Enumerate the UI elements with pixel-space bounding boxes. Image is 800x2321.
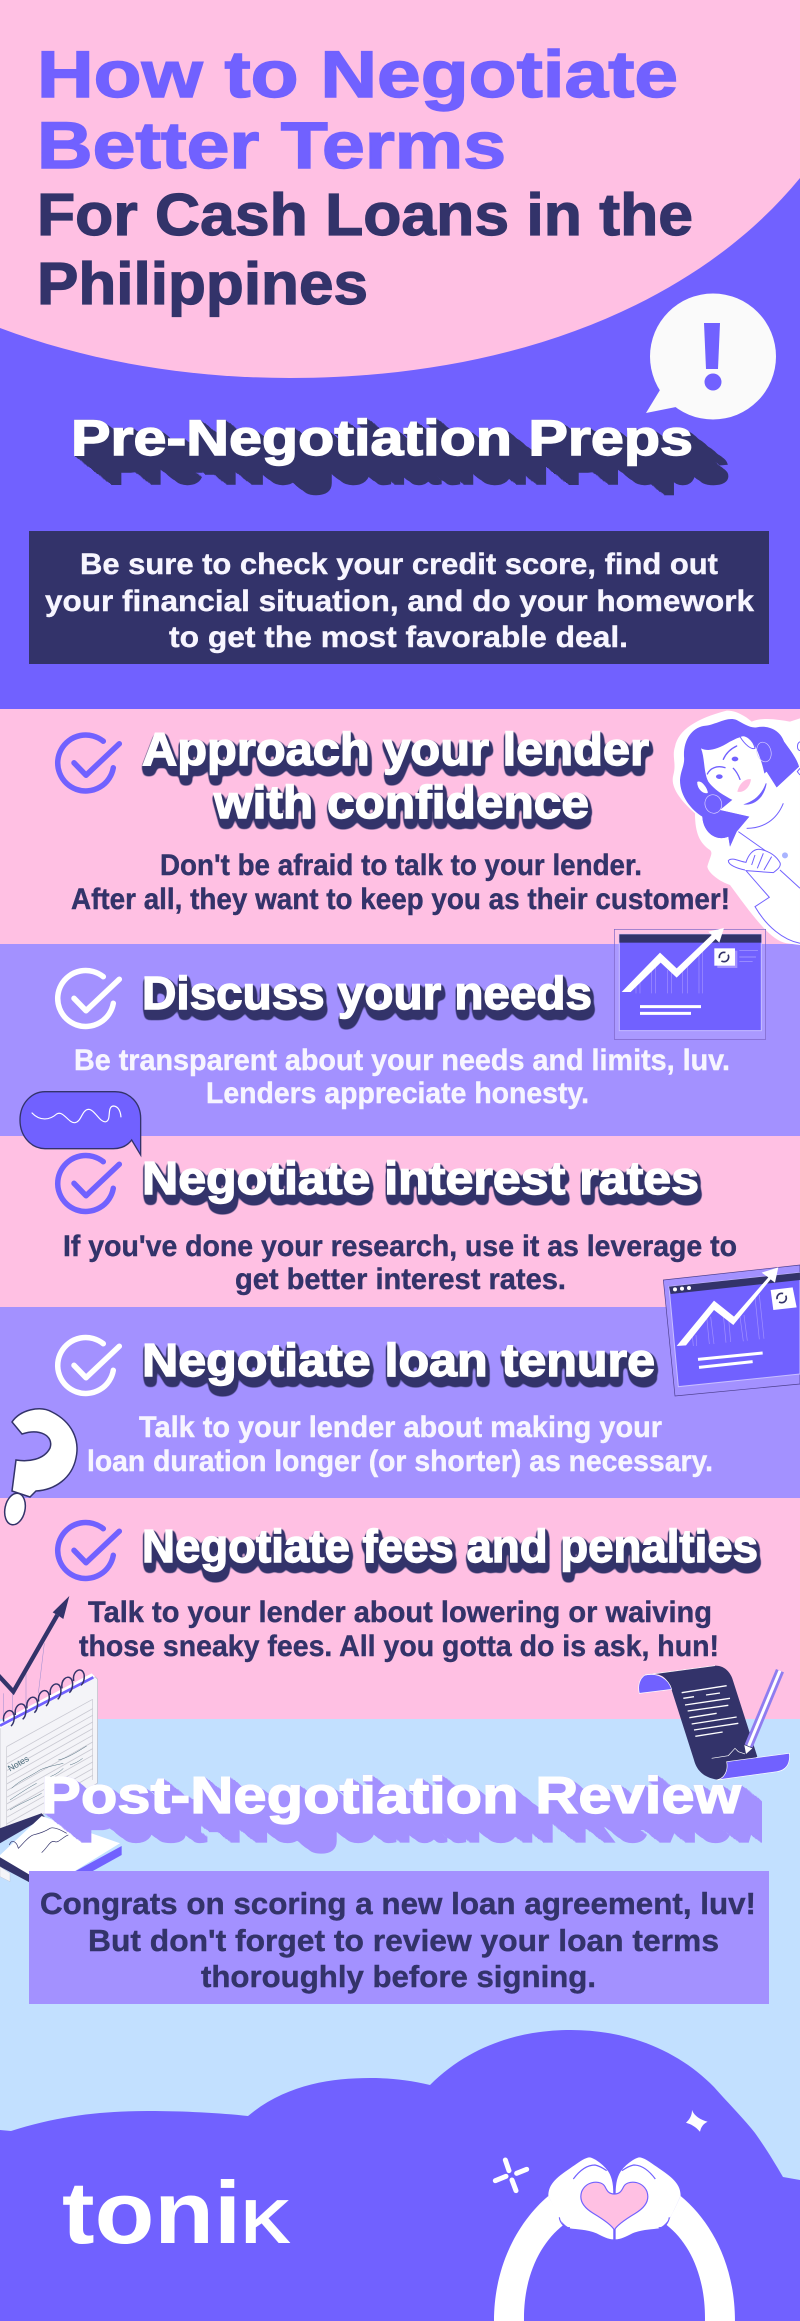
- illustration: squiggle speech bubble: [20, 1092, 141, 1155]
- panel: pre-negotiation text box: your financial situation, and do your homework: [45, 585, 754, 618]
- text: fees body: Talk to your lender about lowering or waiving: [88, 1596, 712, 1629]
- note: Notes handwriting label: Notes: [6, 1753, 31, 1773]
- text: approach body: Don't be afraid to talk to your lender.: [160, 849, 642, 882]
- illustration: growth chart window: [614, 928, 766, 1039]
- band: approach your lender: [0, 709, 800, 944]
- text: interest rates body: get better interest rates.: [235, 1263, 566, 1296]
- heading: Discuss your needs: Discuss your needs: [142, 967, 592, 1019]
- heading: Negotiate fees and penalties: Negotiate fees and penalties: [142, 1520, 758, 1572]
- title: Better Terms: [37, 108, 506, 182]
- illustration: woman pointing at herself: [673, 711, 800, 945]
- text: interest rates body: If you've done your research, use it as leverage to: [63, 1230, 737, 1263]
- illustration: arrow and spiral notepad: [0, 1596, 122, 1883]
- band: negotiate interest rates: [0, 1136, 800, 1307]
- footer cloud: [0, 2030, 800, 2321]
- text: fees body: [79, 1596, 719, 1663]
- header pink curved shape: [0, 0, 800, 378]
- text: interest rates body: [63, 1230, 737, 1296]
- illustration: scroll and pen: [639, 1666, 790, 1780]
- heading: Approach your lender with confidence: with confidence: [213, 776, 589, 828]
- heading: Negotiate loan tenure: Negotiate loan tenure: [142, 1334, 655, 1386]
- text: loan tenure body: [87, 1411, 713, 1478]
- check icon 5: [58, 1522, 119, 1578]
- illustration: question mark: [2, 1409, 77, 1527]
- heading: Approach your lender with confidence: Approach your lender: [142, 723, 649, 775]
- text: discuss body: [74, 1044, 730, 1110]
- panel: post-negotiation text box: thoroughly before signing.: [201, 1959, 596, 1994]
- check icon 1: [58, 735, 119, 791]
- panel: post-negotiation text box: But don't forget to review your loan terms: [88, 1923, 719, 1958]
- panel: pre-negotiation text box: Be sure to check your credit score, find out: [80, 548, 718, 581]
- icon: exclamation speech bubble: [646, 294, 776, 420]
- heading: Post-Negotiation Review: Post-Negotiation Review: [41, 1767, 742, 1825]
- band: negotiate loan tenure: [0, 1307, 800, 1498]
- title: For Cash Loans in the: [37, 182, 693, 248]
- title: Philippines: [37, 251, 368, 317]
- panel: pre-negotiation text box: [29, 531, 769, 664]
- illustration: sparkle and heart hands: [494, 2157, 735, 2321]
- panel: pre-negotiation text box: to get the most favorable deal.: [169, 621, 628, 654]
- check icon 4: [58, 1337, 119, 1393]
- illustration: tilted growth chart window: [663, 1265, 800, 1396]
- title: [37, 37, 693, 317]
- check icon 2: [58, 970, 119, 1026]
- text: approach body: [71, 849, 730, 916]
- band: post-negotiation review: [0, 1719, 800, 2321]
- heading: Pre-Negotiation Preps: Pre-Negotiation Preps: [71, 410, 693, 466]
- panel: intro background: [0, 0, 800, 709]
- band: discuss your needs: [0, 944, 800, 1136]
- text: discuss body: Lenders appreciate honesty.: [206, 1077, 589, 1110]
- text: loan tenure body: Talk to your lender about making your: [139, 1411, 663, 1444]
- heading: Negotiate interest rates: Negotiate interest rates: [142, 1152, 699, 1204]
- text: approach body: After all, they want to keep you as their customer!: [71, 883, 730, 916]
- band: negotiate fees and penalties: [0, 1498, 800, 1719]
- icon: four-point star: [686, 2110, 708, 2132]
- text: fees body: those sneaky fees. All you gotta do is ask, hun!: [79, 1630, 719, 1663]
- check icon 3: [58, 1155, 119, 1211]
- panel: post-negotiation text box: Congrats on scoring a new loan agreement, luv!: [40, 1886, 756, 1921]
- logo: tonik: tonik: [62, 2163, 291, 2262]
- title: How to Negotiate: [37, 37, 678, 111]
- text: discuss body: Be transparent about your needs and limits, luv.: [74, 1044, 730, 1077]
- panel: post-negotiation text box: [29, 1871, 769, 2004]
- text: loan tenure body: loan duration longer (or shorter) as necessary.: [87, 1445, 713, 1478]
- heading: Approach your lender with confidence: [142, 723, 649, 828]
